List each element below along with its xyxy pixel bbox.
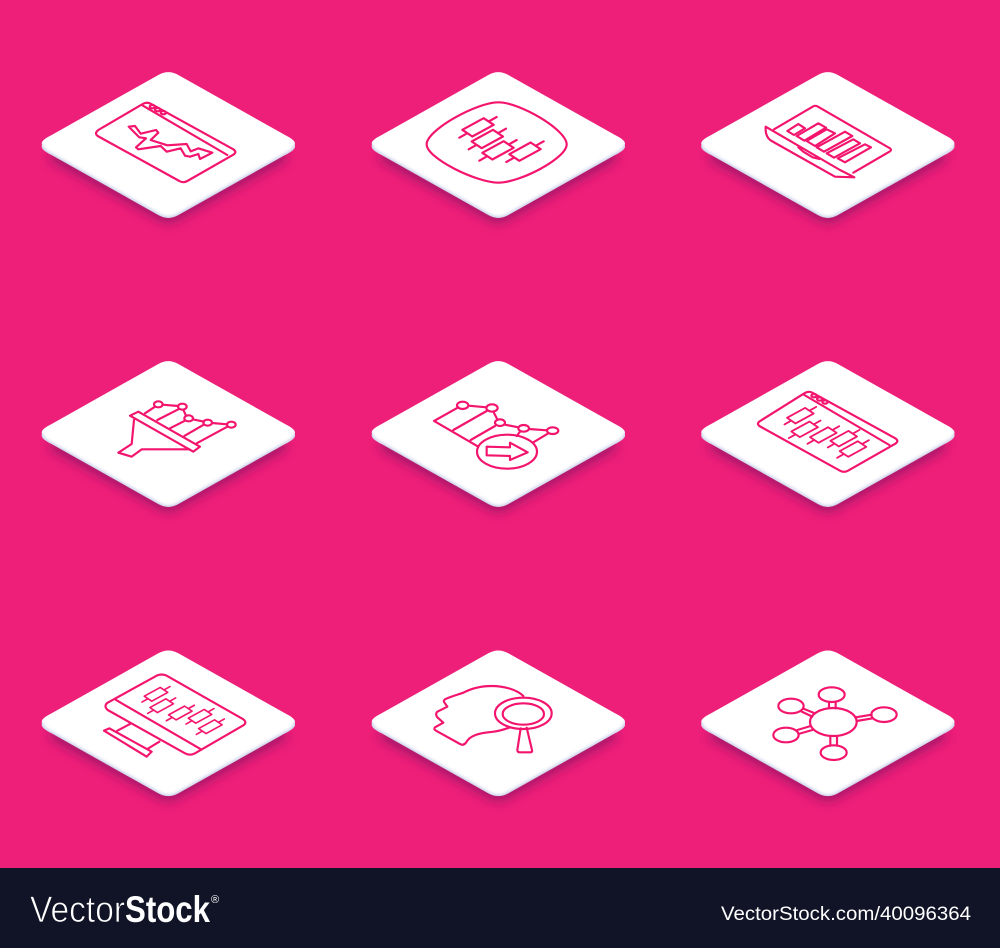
tile: browser window with zigzag arrow <box>30 60 310 230</box>
image id text: VectorStock.com/40096364 <box>721 904 971 925</box>
logo: VectorStock: Stock <box>125 889 210 930</box>
icon: browser candlestick chart <box>758 392 897 472</box>
tile: laptop with bar chart <box>690 60 969 230</box>
tile: head with magnifier <box>360 638 640 808</box>
logo: VectorStock: ® <box>211 894 219 906</box>
tile: network hub <box>690 638 969 808</box>
icon: hub and spoke network <box>773 687 897 760</box>
icon: browser zigzag arrow <box>96 103 235 182</box>
logo: VectorStock: Vector <box>30 889 125 930</box>
tile: desktop monitor with candlesticks <box>30 638 310 808</box>
icon: sales funnel chart <box>118 401 236 457</box>
logo: VectorStock <box>30 889 219 930</box>
icon: candlesticks in rounded frame <box>427 102 567 183</box>
tile: candlestick chart in squircle <box>360 60 640 230</box>
tile: browser window with candlesticks <box>690 349 969 519</box>
tile: chart with arrow badge <box>360 349 640 519</box>
footer bar <box>0 868 1000 948</box>
tile: funnel with dots <box>30 349 310 519</box>
icon: head and magnifying glass <box>434 686 552 752</box>
icon: monitor candlestick chart <box>104 674 245 757</box>
icon: laptop bar chart <box>766 106 891 177</box>
icon: dotted chart with next arrow <box>434 402 558 469</box>
